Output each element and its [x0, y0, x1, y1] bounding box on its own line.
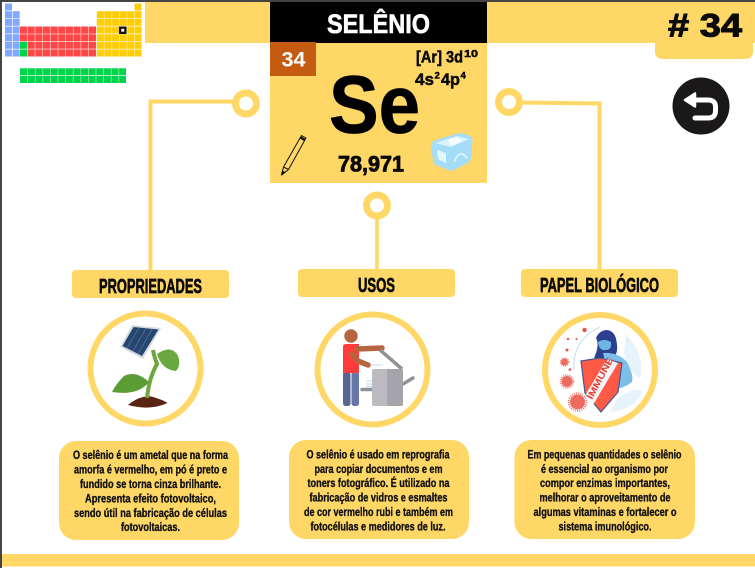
connector: usos [366, 195, 388, 269]
electron configuration: [Ar] 3d [416, 48, 463, 66]
periodic table locator [5, 4, 142, 83]
electron configuration: 10 [464, 48, 478, 60]
symbol: Se [329, 60, 420, 150]
element card [270, 2, 487, 183]
heading: USOS [358, 274, 395, 297]
icon: person at copier [318, 314, 428, 424]
icon: ice cube [431, 133, 472, 171]
text block: sendo útil na fabricação de células [74, 506, 227, 520]
text block: fotovoltaicas. [121, 520, 180, 534]
text block: amorfa é vermelho, em pó é preto e [74, 462, 227, 476]
text block [514, 440, 695, 539]
text block: toners fotográfico. É utilizado na [308, 475, 450, 490]
electron configuration: 4 [460, 70, 466, 82]
icon: plant with solar panel [90, 314, 200, 424]
text block: Apresenta efeito fotovoltaico, [85, 492, 216, 506]
text block: compor enzimas importantes, [540, 476, 670, 490]
title: SELÊNIO [327, 8, 430, 39]
atomic mass: 78,971 [338, 152, 404, 176]
panel: usos [289, 269, 469, 539]
connector: propriedades [150, 93, 256, 270]
text block: fotocélulas e medidores de luz. [310, 520, 446, 534]
text block: fabricação de vidros e esmaltes [310, 490, 448, 504]
element number tab: # 34 [668, 8, 742, 44]
icon: immune shield: IMMUNE [585, 356, 615, 401]
heading [521, 269, 678, 297]
electron configuration: 2 [434, 70, 440, 82]
icon: pencil [282, 136, 306, 175]
heading [298, 269, 455, 297]
text block: O selênio é um ametal que na forma [73, 448, 228, 462]
electron configuration: 4p [441, 70, 460, 89]
text block: de cor vermelho rubi e também em [304, 505, 453, 519]
panel: papel biologico [514, 269, 695, 539]
atomic number [270, 42, 316, 76]
text block: é essencial ao organismo por [541, 462, 668, 476]
text block [59, 441, 239, 540]
selenium marker [119, 26, 126, 34]
text block: sistema imunológico. [558, 520, 652, 534]
electron configuration: 4s [415, 70, 434, 89]
connector: papel biologico [498, 92, 600, 269]
text block: para copiar documentos e em [314, 462, 442, 476]
text block [289, 440, 469, 539]
text block: Em pequenas quantidades o selênio [528, 448, 682, 462]
top header band [145, 2, 755, 43]
bottom band [2, 554, 755, 566]
element number tab [655, 2, 753, 59]
icon: immune shield [545, 315, 655, 425]
heading [72, 270, 229, 298]
back button icon [672, 78, 730, 134]
text block: algumas vitaminas e fortalecer o [534, 505, 676, 519]
text block: melhorar o aproveitamento de [540, 490, 671, 504]
panel: propriedades [59, 270, 239, 540]
text block: O selênio é usado em reprografia [306, 448, 450, 462]
atomic number: 34 [282, 48, 306, 72]
text block: fundido se torna cinza brilhante. [80, 477, 221, 491]
title [270, 2, 487, 43]
card background [270, 43, 487, 183]
electron configuration [415, 48, 478, 89]
heading: PAPEL BIOLÓGICO [540, 273, 659, 297]
heading: PROPRIEDADES [99, 275, 202, 298]
